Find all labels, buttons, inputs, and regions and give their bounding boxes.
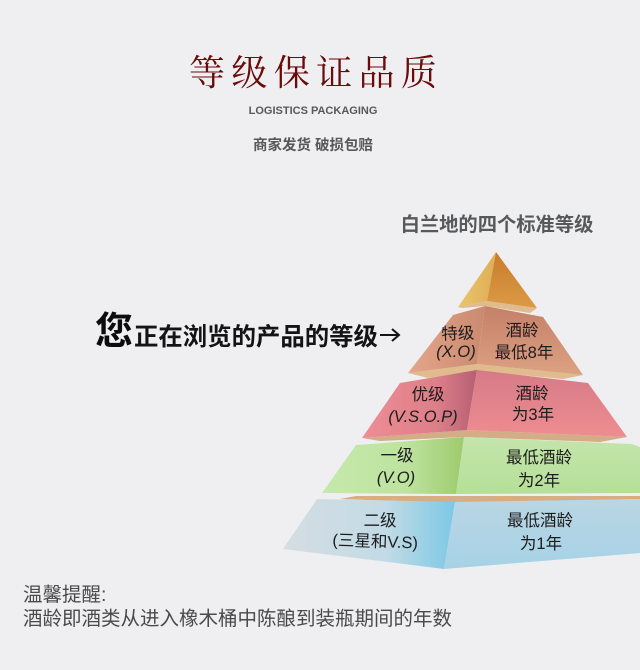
label: 二级: 二级: [364, 511, 396, 530]
title: 等级保证品质: [189, 45, 443, 96]
note body: 酒龄即酒类从进入橡木桶中陈酿到装瓶期间的年数: [23, 608, 452, 630]
label: 为3年: 为3年: [512, 405, 554, 424]
pyramid: [283, 252, 640, 569]
callout: big character: 您: [95, 311, 133, 353]
subtitle: english: LOGISTICS PACKAGING: [249, 105, 377, 117]
tier: 一级 V.O: [322, 437, 640, 503]
label: 为2年: 为2年: [518, 471, 560, 490]
label: 酒龄: 酒龄: [506, 321, 539, 340]
note heading: 温馨提醒:: [23, 584, 106, 606]
label: 最低酒龄: 最低酒龄: [506, 448, 572, 467]
tier: 特级 X.O: [408, 306, 583, 379]
label: 最低酒龄: 最低酒龄: [507, 511, 574, 530]
label: V.O: (V.O): [377, 469, 415, 487]
callout: text: 正在浏览的产品的等级: [134, 324, 378, 351]
label: 三星和V.S: (三星和V.S): [332, 531, 418, 552]
label: 特级: 特级: [441, 323, 475, 344]
label: 优级: 优级: [412, 385, 444, 404]
subtitle: chinese: 商家发货 破损包赔: [253, 136, 373, 154]
label: 一级: 一级: [380, 446, 414, 465]
label: 最低8年: 最低8年: [495, 343, 553, 362]
tier: 优级 V.S.O.P: [362, 370, 627, 442]
pyramid heading: 白兰地的四个标准等级: [401, 213, 593, 236]
reminder note: [23, 584, 452, 630]
label: X.O: (X.O): [436, 343, 476, 361]
tier: 二级 三星和V.S: [283, 499, 640, 569]
label: 为1年: 为1年: [520, 534, 562, 553]
label: V.S.O.P: (V.S.O.P): [388, 408, 458, 426]
arrow: [380, 329, 399, 341]
label: 酒龄: 酒龄: [516, 384, 549, 403]
current grade callout: [95, 311, 399, 353]
tier: apex: [458, 252, 537, 313]
